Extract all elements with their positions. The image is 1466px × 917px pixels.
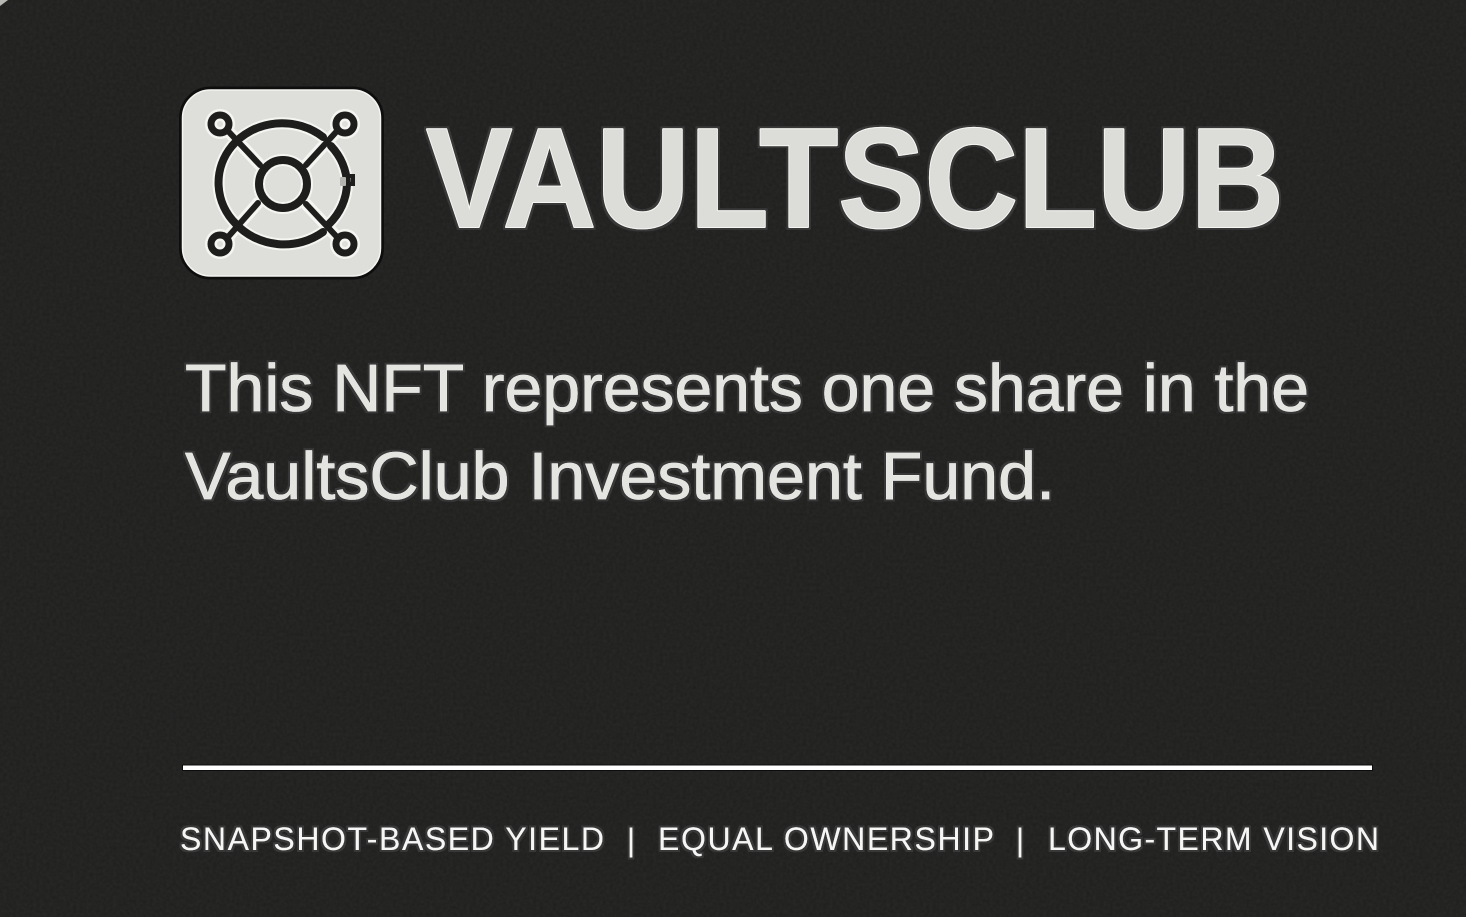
- description text: VaultsClub Investment Fund.: [185, 439, 1055, 514]
- footer tagline: SNAPSHOT-BASED YIELD: [180, 821, 604, 857]
- divider line: [182, 765, 1372, 770]
- footer tagline: LONG-TERM VISION: [1048, 821, 1379, 857]
- footer tagline: |: [1016, 822, 1024, 858]
- footer tagline: EQUAL OWNERSHIP: [658, 821, 994, 857]
- footer tagline: [180, 821, 1379, 858]
- title: VAULTSCLUB: [426, 99, 1284, 258]
- logo icon: vault door: [180, 88, 382, 278]
- description text: This NFT represents one share in the: [185, 351, 1309, 426]
- footer tagline: |: [627, 822, 635, 858]
- description text: [185, 351, 1309, 514]
